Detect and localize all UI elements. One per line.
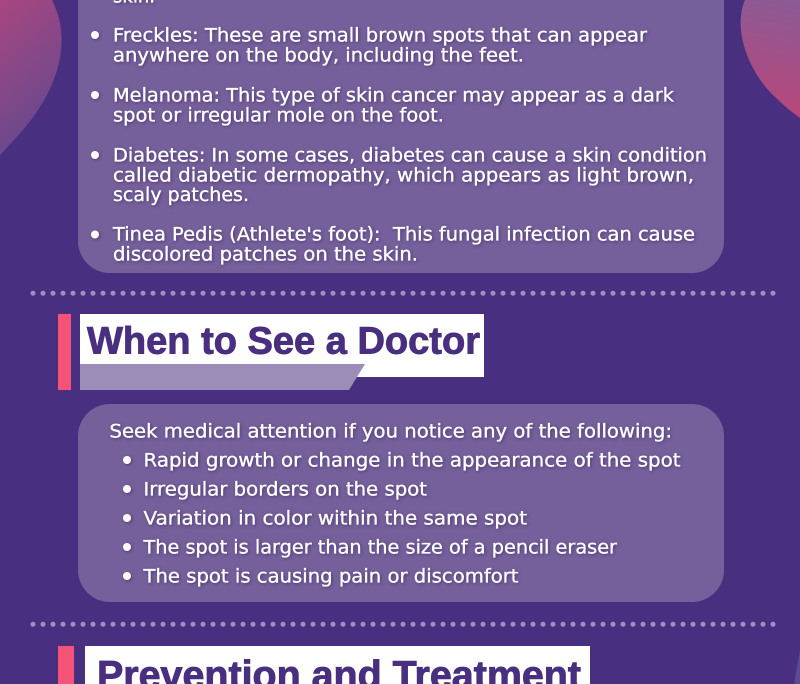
item: diabetes: [91, 146, 707, 206]
item: melanoma: Melanoma: This type of skin cancer may appear as a dark: [113, 86, 674, 107]
decorative shape: bottom right: [794, 650, 800, 684]
decorative blob: right: [741, 0, 800, 118]
heading text: When to See a Doctor: [87, 320, 480, 362]
warning signs list: [110, 422, 680, 588]
item: diabetes: called diabetic dermopathy, which appears as light brown,: [113, 166, 694, 186]
accent bar: [58, 314, 71, 390]
item: tinea pedis: discolored patches on the skin.: [113, 245, 418, 266]
intro text: Seek medical attention if you notice any of the following:: [110, 422, 672, 443]
panel: warning signs: [78, 404, 724, 602]
accent bar: [58, 646, 74, 684]
heading background: [85, 646, 590, 684]
item: melanoma: [91, 86, 674, 127]
item: rapid growth: Rapid growth or change in the appearance of the spot: [144, 451, 680, 472]
item: freckles: anywhere on the body, including the feet.: [113, 46, 524, 67]
panel: conditions: [78, 0, 724, 273]
heading background: [80, 314, 484, 377]
item: diabetes: Diabetes: In some cases, diabetes can cause a skin condition: [113, 146, 707, 167]
heading: when to see a doctor: [58, 314, 484, 390]
conditions list: [91, 0, 707, 266]
decorative blob: left: [0, 0, 62, 155]
heading tab: [80, 364, 365, 390]
item: tinea pedis: [91, 225, 695, 266]
item: irregular borders: Irregular borders on the spot: [144, 480, 427, 501]
item: larger spot: The spot is larger than the size of a pencil eraser: [142, 538, 617, 559]
item: freckles: Freckles: These are small brown spots that can appear: [113, 26, 647, 47]
item: pain: The spot is causing pain or discomfort: [142, 567, 518, 588]
item: freckles: [91, 26, 647, 67]
panel background: [78, 0, 724, 273]
item: melanoma: spot or irregular mole on the foot.: [113, 106, 444, 127]
item: diabetes: scaly patches.: [113, 185, 249, 206]
item: color variation: Variation in color within the same spot: [144, 509, 527, 530]
panel background: [78, 404, 724, 602]
heading: prevention and treatment: [58, 646, 590, 684]
item: tinea pedis: Tinea Pedis (Athlete's foot): This fungal infection can cause: [112, 225, 695, 246]
